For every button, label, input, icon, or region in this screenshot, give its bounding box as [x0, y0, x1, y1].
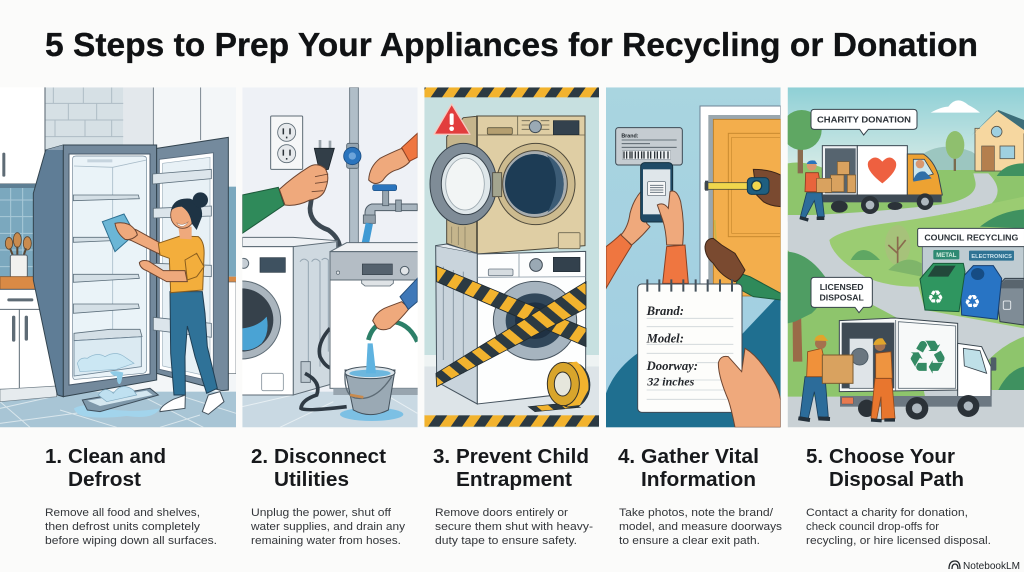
step 4 text [619, 507, 782, 547]
warning tape roll [528, 362, 590, 412]
step 2 heading: Disconnect [274, 445, 386, 468]
shoes [160, 392, 224, 414]
lower arm [139, 260, 187, 282]
ice tray on floor with puddle [74, 387, 160, 418]
water pipe with valve [344, 87, 361, 249]
step 2 heading: Utilities [274, 468, 349, 491]
left hand [621, 191, 650, 245]
floor [0, 392, 236, 427]
lower white washer [436, 244, 586, 404]
step 5 text: Contact a charity for donation, [806, 507, 968, 519]
smile [177, 222, 188, 227]
step 5 heading: 5. [806, 445, 823, 468]
door and frame [700, 106, 781, 296]
step 2 heading: 2. [251, 445, 268, 468]
title: 5 Steps to Prep Your Appliances for Recycling or Donation [45, 26, 978, 63]
notepad: Doorway: [646, 359, 698, 373]
panel: disconnect utilities illustration [242, 87, 418, 428]
step 4 text: to ensure a clear exit path. [619, 535, 760, 547]
right grass [988, 337, 1024, 390]
step 4 heading: Gather Vital [641, 445, 759, 468]
orange sleeve [402, 133, 417, 161]
crisper drawer with ice [74, 337, 141, 376]
step 1 text [45, 507, 217, 547]
step 5 text: check council drop-offs for [806, 521, 939, 533]
raised arm [128, 228, 160, 254]
notebooklm watermark: NotebookLM [963, 561, 1020, 572]
recycling shelter: ELECTRONICS [971, 254, 1012, 260]
water puddle [340, 408, 403, 421]
cloth [102, 214, 135, 252]
orange sleeves [606, 234, 688, 288]
wall outlet [271, 116, 303, 169]
hand turning tap [369, 148, 411, 184]
workers carrying box [798, 335, 895, 421]
open washer door [430, 143, 502, 225]
washing machine [242, 236, 338, 396]
step 1 heading: Clean and [68, 445, 166, 468]
grey bin [996, 278, 1024, 325]
measuring tape [705, 178, 769, 243]
step 3 text: duty tape to ensure safety. [435, 535, 577, 547]
recycling shelter: METAL [936, 253, 957, 259]
step 3 heading: 3. [433, 445, 450, 468]
warning triangle icon [434, 104, 470, 134]
rear drain hose [301, 328, 347, 410]
bushes [980, 163, 1024, 390]
dishwasher [330, 243, 420, 395]
faucet and water line [363, 185, 417, 245]
green recycling bin: ♻ [927, 286, 944, 307]
bare tree and shrubs [851, 225, 922, 277]
step 2 text: Unplug the power, shut off [251, 507, 392, 519]
warning tape crossing lower washer [436, 266, 586, 387]
refrigerator open door [153, 137, 228, 391]
woman cleaning fridge [102, 192, 224, 414]
hand on cloth [115, 223, 137, 240]
label: charity donation: CHARITY DONATION [817, 114, 911, 124]
appliance label plate [616, 128, 682, 165]
hose [368, 322, 417, 342]
label: charity donation [811, 109, 917, 135]
plug [314, 140, 334, 171]
step 4 text: model, and measure doorways [619, 521, 782, 533]
house [971, 110, 1024, 171]
upper washer [447, 116, 585, 254]
hand holding hose [373, 302, 409, 330]
blue recycling bin: ♻ [964, 291, 981, 312]
step 5 text [806, 507, 991, 547]
lower cabinet and counter [0, 277, 62, 402]
tree left top [782, 110, 822, 173]
step 2 heading [251, 445, 386, 491]
arm in green sleeve holding plug [242, 165, 328, 233]
notepad: Brand: [646, 304, 684, 318]
step 3 text [435, 507, 593, 547]
background counter right [228, 186, 236, 374]
floor blob [606, 293, 781, 427]
refrigerator body [33, 145, 157, 397]
step 3 heading [433, 445, 589, 491]
blue backsplash tiles [0, 184, 36, 276]
step 1 heading: Defrost [68, 468, 141, 491]
step 5 text: recycling, or hire licensed disposal. [806, 535, 991, 547]
panel: prevent child entrapment illustration [424, 87, 599, 427]
central grass island [829, 197, 1024, 328]
face [170, 206, 192, 229]
upper grass [788, 162, 1024, 220]
step 4 text: Take photos, note the brand/ [619, 507, 774, 519]
water stream [366, 343, 376, 373]
disposal truck: ♻ [907, 331, 949, 383]
step 3 heading: Entrapment [456, 468, 572, 491]
right hand [657, 191, 683, 245]
notepad [638, 279, 742, 412]
hand on tape [753, 169, 781, 207]
charity truck [822, 146, 942, 214]
green recycling bin [920, 263, 965, 312]
blue recycling bin [960, 266, 1002, 319]
smartphone [641, 163, 673, 222]
label: licensed disposal: DISPOSAL [820, 293, 865, 303]
worker loading box [800, 160, 832, 220]
step 2 text: remaining water from hoses. [251, 535, 401, 547]
panel: clean and defrost illustration [0, 85, 236, 427]
step 1 heading [45, 445, 166, 491]
brown hand and green sleeve [705, 238, 781, 300]
step 3 heading: Prevent Child [456, 445, 589, 468]
step 4 heading: 4. [618, 445, 635, 468]
fridge shelves [73, 195, 142, 341]
panel: gather vital information illustration [606, 87, 781, 427]
legs [170, 292, 217, 395]
cloud [931, 100, 980, 113]
step 5 heading [806, 445, 964, 491]
step 1 text: Remove all food and shelves, [45, 507, 200, 519]
step 1 heading: 1. [45, 445, 62, 468]
step 5 heading: Choose Your [829, 445, 955, 468]
lower grass [788, 250, 925, 397]
power cord [308, 200, 342, 247]
road [788, 173, 1024, 427]
notepad: Model: [646, 332, 684, 346]
label: licensed disposal: LICENSED [820, 282, 864, 292]
panel: choose your disposal path illustration [782, 87, 1024, 427]
recycling shelter [922, 245, 1024, 288]
step 2 text [250, 507, 405, 547]
label: council recycling: COUNCIL RECYCLING [924, 233, 1019, 243]
step 1 text: before wiping down all surfaces. [45, 535, 217, 547]
step 3 text: Remove doors entirely or [435, 507, 568, 519]
neck [178, 227, 192, 239]
distant hills [915, 147, 998, 170]
notepad: 32 inches [646, 374, 695, 388]
step 5 heading: Disposal Path [829, 468, 964, 491]
utensils jar [5, 233, 31, 277]
upper cabinet [0, 85, 45, 184]
disposal truck [839, 318, 996, 420]
hazard stripe top [424, 87, 599, 97]
step 4 heading: Information [641, 468, 756, 491]
label: council recycling [918, 228, 1024, 247]
tree left lower [788, 252, 826, 362]
shirt [158, 236, 204, 293]
appliance label plate: Brand: [621, 133, 639, 139]
step 3 text: secure them shut with heavy- [435, 521, 593, 533]
water drip [110, 371, 123, 384]
step 2 text: water supplies, and drain any [250, 521, 405, 533]
hazard stripe bottom [424, 415, 599, 427]
hair and bun [171, 199, 202, 230]
label: licensed disposal [811, 277, 872, 313]
small tree [946, 131, 964, 171]
bucket [345, 367, 395, 415]
step 1 text: then defrost units completely [45, 521, 200, 533]
shirt sleeve [185, 253, 204, 280]
blue sleeve [400, 278, 417, 309]
step 4 heading [618, 445, 759, 491]
hand holding notepad [718, 348, 781, 427]
